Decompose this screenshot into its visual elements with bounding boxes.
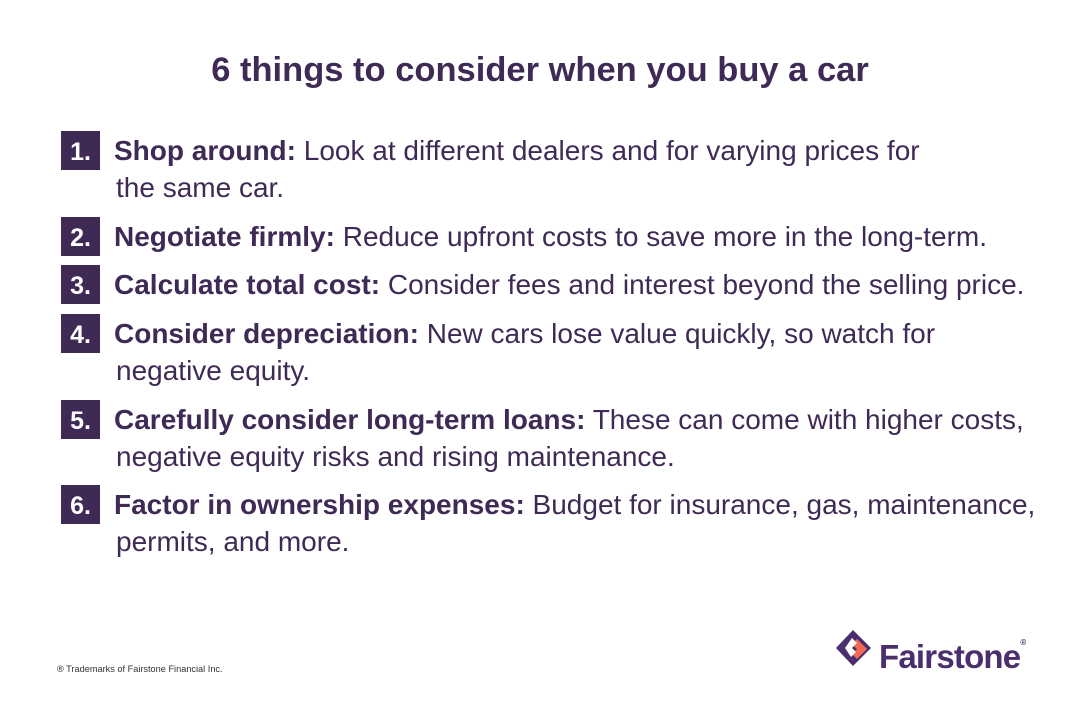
- item 3: 3.: [70, 272, 91, 300]
- item 1: 1.: [70, 138, 91, 166]
- item 5: Carefully consider long-term loans: These can come with higher costs,: [114, 404, 1024, 435]
- item 1: Shop around: Look at different dealers and for varying prices for: [114, 135, 920, 166]
- item 6: [61, 485, 1035, 557]
- item 6: Factor in ownership expenses: Budget for insurance, gas, maintenance,: [114, 489, 1035, 520]
- item 2: 2.: [70, 224, 91, 252]
- item 5: 5.: [70, 407, 91, 435]
- item 3: Calculate total cost: Consider fees and interest beyond the selling price.: [114, 269, 1024, 300]
- item 4: negative equity.: [116, 355, 310, 386]
- footnote: ® Trademarks of Fairstone Financial Inc.: [57, 664, 223, 674]
- icon: diamond: [836, 630, 871, 666]
- item 4: [61, 314, 935, 386]
- item 1: the same car.: [116, 172, 284, 203]
- item 4: 4.: [70, 321, 91, 349]
- title: 6 things to consider when you buy a car: [211, 51, 869, 89]
- logo: [836, 630, 1026, 675]
- item 6: 6.: [70, 492, 91, 520]
- item 6: permits, and more.: [116, 526, 349, 557]
- item 5: negative equity risks and rising maintenance.: [116, 441, 675, 472]
- logo text: Fairstone®: [879, 638, 1025, 675]
- item 5: [61, 400, 1024, 472]
- item 1: [61, 131, 920, 203]
- item 2: Negotiate firmly: Reduce upfront costs to save more in the long-term.: [114, 221, 987, 252]
- item 4: Consider depreciation: New cars lose value quickly, so watch for: [114, 318, 935, 349]
